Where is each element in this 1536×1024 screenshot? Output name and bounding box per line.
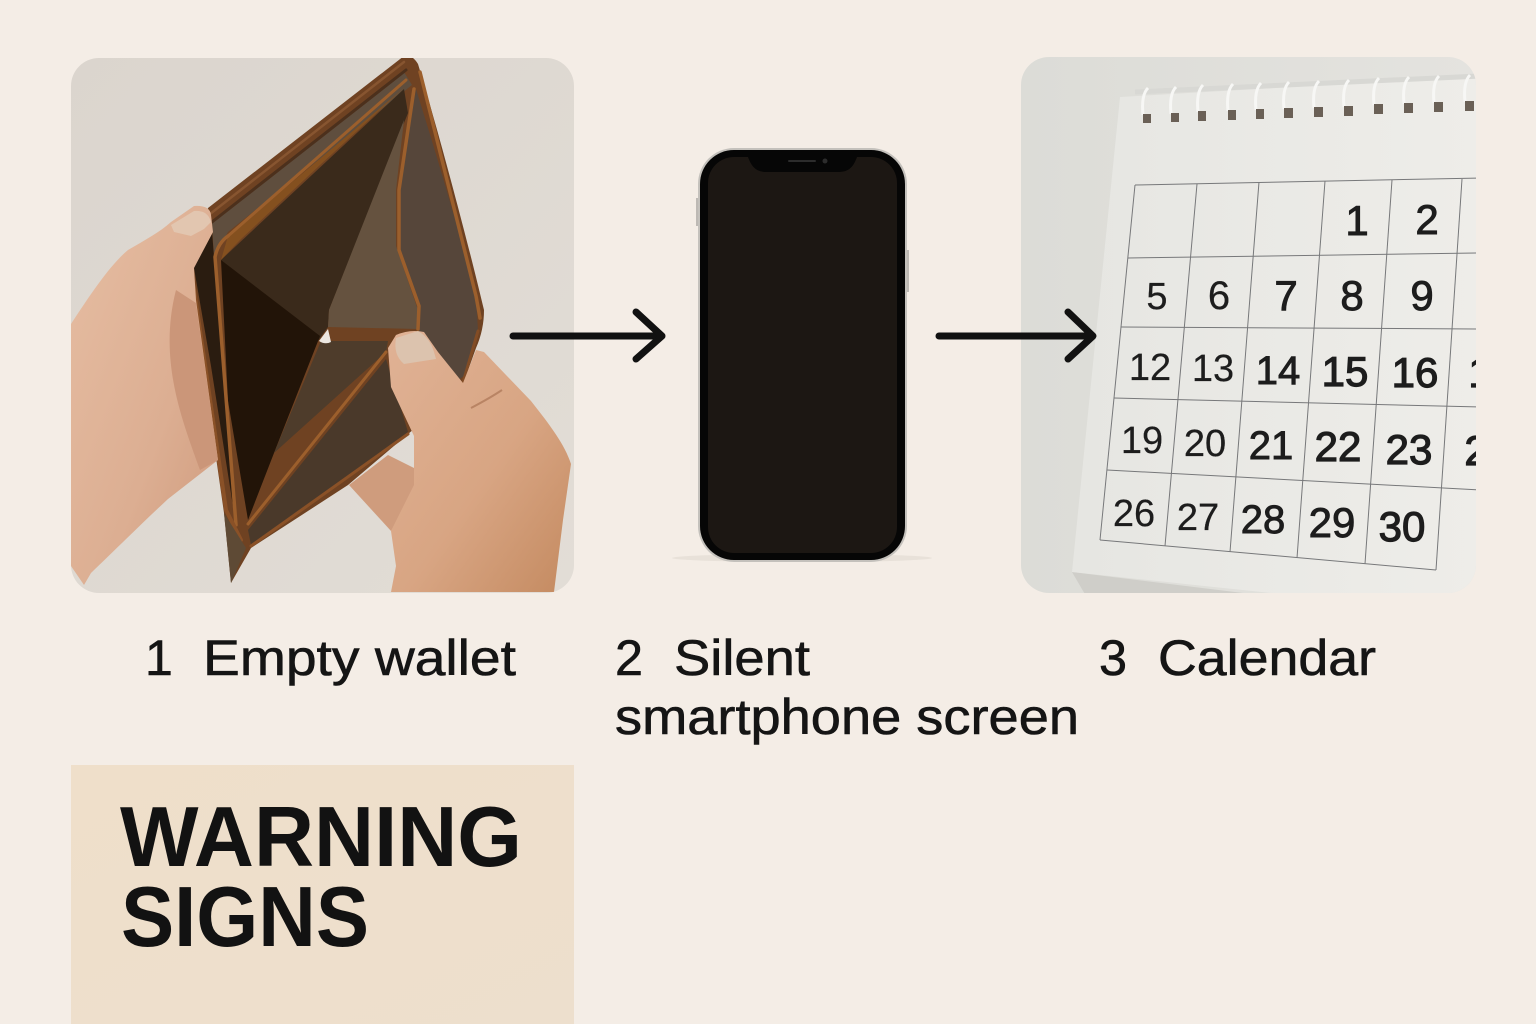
calendar dates: 1 — [1475, 272, 1499, 319]
lower panel — [248, 359, 408, 545]
title: SIGNS — [121, 870, 369, 965]
left dark gap — [194, 234, 237, 528]
calendar dates: 26 — [1113, 493, 1155, 535]
label: step 3 calendar: 3 — [1099, 630, 1127, 686]
calendar dates: 16 — [1392, 349, 1438, 396]
arrow: phone to calendar — [939, 312, 1093, 359]
knuckle fold — [471, 390, 502, 408]
top back lining — [212, 72, 412, 257]
icon: calendar page — [1072, 572, 1241, 593]
calendar dates: 19 — [1121, 420, 1163, 462]
calendar dates: 13 — [1192, 348, 1234, 390]
title: WARNING — [120, 790, 522, 885]
leather edge seams — [192, 62, 480, 546]
thumbnail — [171, 211, 211, 236]
inner compartment upper — [221, 89, 408, 341]
thumbnail — [395, 331, 436, 364]
orange inner strip — [221, 88, 404, 260]
label: step 2 silent smartphone screen: smartphone screen — [615, 689, 1079, 745]
calendar dates: 1 — [1345, 197, 1369, 244]
inner compartment lower dark — [221, 260, 320, 520]
label: step 2 silent smartphone screen: Silent — [674, 630, 810, 686]
icon: wallet — [188, 56, 484, 583]
lower pocket — [274, 341, 388, 452]
right inner pocket — [328, 120, 418, 329]
calendar dates — [1114, 204, 1476, 542]
calendar dates: 22 — [1315, 423, 1361, 470]
icon: spiral binding — [1135, 75, 1480, 123]
label: step 2 silent smartphone screen — [615, 630, 1079, 745]
calendar grid — [1100, 178, 1480, 570]
calendar dates: 15 — [1322, 348, 1368, 395]
calendar dates: 6 — [1208, 274, 1230, 318]
icon: smartphone — [672, 148, 932, 562]
panel: calendar photo — [1021, 57, 1499, 620]
hand inner shadow — [170, 290, 218, 470]
right outer lining — [399, 89, 478, 395]
icon: right hand — [349, 331, 571, 592]
title — [120, 790, 522, 965]
calendar dates: 7 — [1274, 272, 1298, 319]
calendar dates: 27 — [1177, 497, 1219, 539]
calendar dates: 8 — [1340, 272, 1364, 319]
calendar dates: 2 — [1464, 427, 1488, 474]
tip of wallet — [224, 513, 246, 583]
calendar dates: 14 — [1256, 349, 1300, 393]
icon: left hand — [71, 206, 218, 585]
calendar dates: 12 — [1129, 347, 1171, 389]
panel: empty wallet photo — [71, 56, 574, 593]
calendar dates: 29 — [1309, 499, 1355, 546]
gap of light through wallet — [319, 329, 331, 343]
calendar dates: 2 — [1415, 196, 1439, 243]
calendar dates: 20 — [1184, 423, 1226, 465]
label: step 3 calendar: Calendar — [1158, 630, 1376, 686]
label: step 2 silent smartphone screen: 2 — [615, 630, 643, 686]
calendar dates: 1 — [1468, 349, 1492, 396]
calendar dates: 23 — [1386, 426, 1432, 473]
calendar dates: 5 — [1146, 276, 1168, 318]
panel: warning signs heading — [71, 765, 574, 1024]
calendar dates: 9 — [1410, 272, 1434, 319]
arrow: wallet to phone — [513, 312, 662, 359]
calendar dates: 30 — [1379, 503, 1425, 550]
calendar dates: 28 — [1241, 498, 1285, 542]
wallet outer leather — [191, 56, 484, 583]
label: step 1 empty wallet: Empty wallet — [203, 630, 516, 686]
calendar dates: 21 — [1249, 424, 1293, 468]
label: step 1 empty wallet: 1 — [145, 630, 173, 686]
